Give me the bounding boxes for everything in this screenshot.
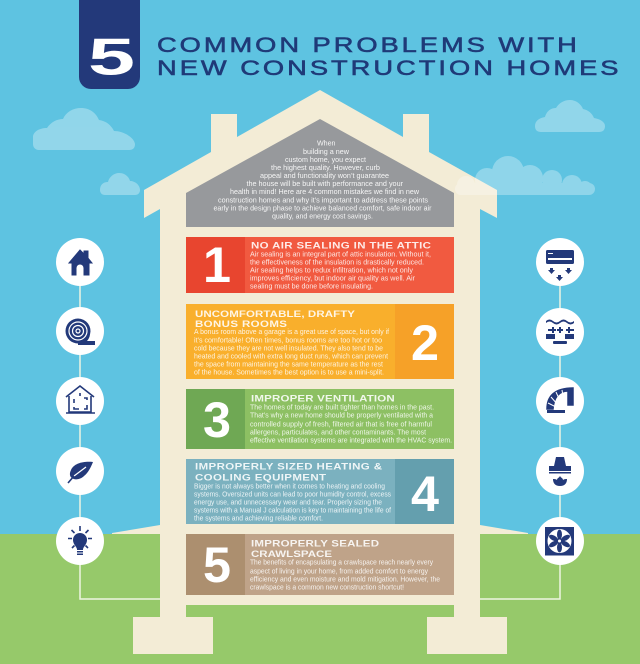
panel 2: bonus rooms: heated and cooled with extra long duct runs, which can prevent xyxy=(194,352,388,360)
intro text: When xyxy=(317,138,336,148)
panel 2: bonus rooms: of the house. Sometimes the best option is to use a mini-split. xyxy=(194,368,384,376)
cloud overlapping the roof xyxy=(455,156,595,195)
panel 5: crawlspace: efficiency and even moisture and mold mitigation. However, the xyxy=(250,574,440,584)
ground braces xyxy=(112,525,528,534)
title: COMMON PROBLEMS WITH xyxy=(157,34,577,57)
panel 4: heating and cooling sizing: the systems and achieving reliable comfort. xyxy=(194,514,323,522)
panel 1: attic air sealing: sealing must be done before insulating. xyxy=(250,282,373,290)
intro text: custom home, you expect xyxy=(285,155,366,164)
icon: crawlspace vents xyxy=(536,308,584,356)
panel 3: ventilation: allergens, particulates, and other contaminants. The most xyxy=(250,428,426,436)
panel 4: heating and cooling sizing: energy use, and unnecessary wear and tear. Properly sizing the xyxy=(194,498,382,506)
panel 5: crawlspace: IMPROPERLY SEALED xyxy=(251,539,380,549)
panel 2: bonus rooms: it’s comfortable! Often times, bonus rooms are too hot or too xyxy=(194,336,382,344)
panel 5: crawlspace: crawlspace is a common new construction shortcut! xyxy=(250,582,404,592)
panel 2: bonus rooms xyxy=(186,304,454,379)
panel 2: bonus rooms: UNCOMFORTABLE, DRAFTY xyxy=(195,310,355,320)
intro text: the highest quality. However, curb xyxy=(271,163,380,172)
panel 1: attic air sealing: 1 xyxy=(203,237,231,293)
intro text: appeal and functionality won’t guarantee xyxy=(260,171,389,180)
panel 1: attic air sealing: the effectiveness of the insulation is drastically reduced. xyxy=(250,258,424,266)
icon: leaf xyxy=(56,447,104,495)
title: NEW CONSTRUCTION HOMES xyxy=(157,57,618,80)
house body xyxy=(133,90,507,654)
panel 5: crawlspace: The benefits of encapsulating a crawlspace reach nearly every xyxy=(250,558,433,566)
title xyxy=(157,34,618,80)
header tab with number 5: 5 xyxy=(88,28,135,86)
panel 4: heating and cooling sizing: IMPROPERLY SIZED HEATING & xyxy=(195,462,383,472)
intro text: the house will be built with performance and your xyxy=(246,179,404,188)
attic intro panel xyxy=(186,119,454,227)
intro text: quality, and energy cost savings. xyxy=(272,212,373,220)
panel 4: heating and cooling sizing xyxy=(186,459,454,524)
intro text xyxy=(214,138,432,220)
panel 1: attic air sealing: improves efficiency, but indoor air quality as well. Air xyxy=(250,274,416,282)
icon: house xyxy=(56,238,104,286)
header tab with number 5 xyxy=(79,0,140,89)
panel 4: heating and cooling sizing: 4 xyxy=(411,466,439,522)
panel 2: bonus rooms: cold because they are not well insulated. They also tend to be xyxy=(194,344,383,352)
panel 3: ventilation: 3 xyxy=(203,392,231,448)
panel 4: heating and cooling sizing: Bigger is not always better when it comes to heating and cooling xyxy=(194,482,385,490)
intro text: health in mind! Here are 4 common mistakes we find in new xyxy=(230,187,420,196)
panel 4: heating and cooling sizing: systems with a Manual J calculation is key to maintaining the life of xyxy=(194,506,391,514)
icon: duct elbow xyxy=(536,377,584,425)
panel 5: crawlspace xyxy=(186,534,454,595)
panel 1: attic air sealing xyxy=(186,237,454,293)
connector lines xyxy=(80,262,560,599)
panel 2: bonus rooms: 2 xyxy=(411,315,439,371)
icon: light bulb xyxy=(56,517,104,565)
icon: house frame with airflow xyxy=(56,377,104,425)
panel 5: crawlspace: CRAWLSPACE xyxy=(251,550,332,560)
panel 1: attic air sealing: Air sealing is an integral part of attic insulation. Without it, xyxy=(250,250,431,258)
panel 2: bonus rooms: the space from maintaining the same temperature as the rest xyxy=(194,360,383,368)
panel 3: ventilation: IMPROPER VENTILATION xyxy=(251,394,395,404)
panel 1: attic air sealing: Air sealing helps to redux infiltration, which not only xyxy=(250,266,413,274)
panel 4: heating and cooling sizing: COOLING EQUIPMENT xyxy=(195,473,327,483)
panel 3: ventilation xyxy=(186,389,454,449)
panel 5: crawlspace: aspect of living in your home, from added comfort to energy xyxy=(250,566,428,576)
intro text: construction homes and why it’s important to address these points xyxy=(218,196,428,204)
panel 3: ventilation: That’s why a new home should be properly ventilated with a xyxy=(250,410,433,420)
icon: exhaust fan xyxy=(536,517,584,565)
ground xyxy=(0,534,640,664)
intro text: early in the design phase to achieve balanced comfort, safe indoor air xyxy=(214,204,432,212)
icon: air conditioner xyxy=(536,238,584,286)
panel 2: bonus rooms: A bonus room above a garage is a great use of space, but only if xyxy=(194,327,389,336)
clouds behind the house xyxy=(33,100,605,195)
panel 3: ventilation: The homes of today are built tighter than homes in the past. xyxy=(250,402,434,412)
panel 3: ventilation: effective ventilation systems are integrated with the HVAC system. xyxy=(250,436,452,444)
panel 1: attic air sealing: NO AIR SEALING IN THE ATTIC xyxy=(251,241,432,251)
panel 2: bonus rooms: BONUS ROOMS xyxy=(195,320,287,330)
icon: insulation roll xyxy=(56,307,104,355)
icon: range hood xyxy=(536,447,584,495)
panel 5: crawlspace: 5 xyxy=(203,537,231,593)
intro text: building a new xyxy=(303,147,350,156)
panel 4: heating and cooling sizing: systems. Oversized units can lead to poor humidity control, excess xyxy=(194,490,391,498)
panel 3: ventilation: controlled supply of fresh, filtered air that is free of harmful xyxy=(250,420,432,428)
